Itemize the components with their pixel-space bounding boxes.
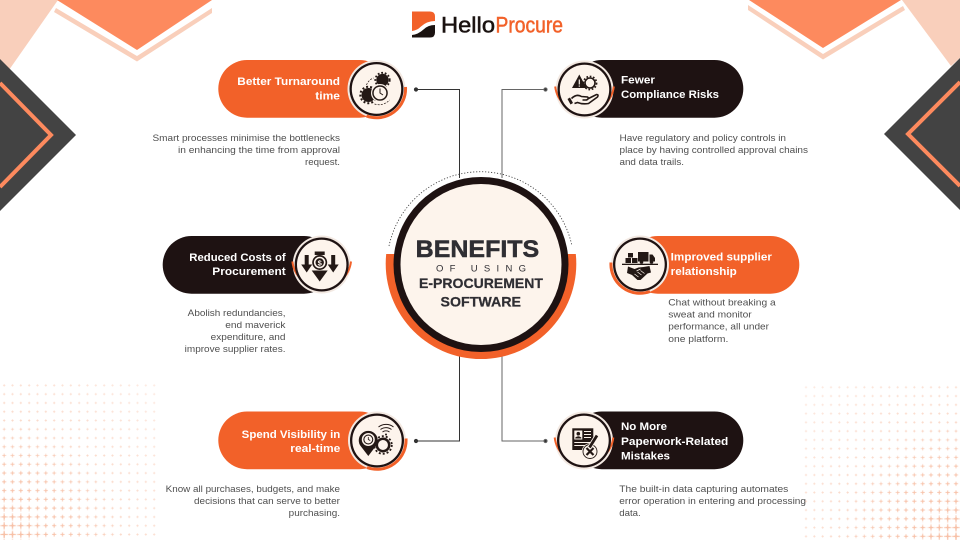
icon: warning, gear and hand xyxy=(555,60,614,118)
panel: fewer compliance risks xyxy=(555,60,808,167)
pill title: Procurement xyxy=(212,266,286,278)
pill title xyxy=(621,74,719,101)
pill title: Paperwork-Related xyxy=(621,436,728,448)
pill xyxy=(163,236,333,294)
icon: money and down arrows xyxy=(292,236,351,294)
description: sweat and monitor xyxy=(668,308,752,320)
description: Smart processes minimise the bottlenecks xyxy=(152,132,340,143)
pill xyxy=(218,60,388,118)
pill title: Mistakes xyxy=(621,450,670,462)
description: one platform. xyxy=(668,333,728,344)
description xyxy=(619,483,806,518)
orange half ring xyxy=(386,254,576,359)
description: Chat without breaking a xyxy=(668,296,777,308)
logo: HelloProcure xyxy=(412,12,563,38)
icon: money and down arrows: $ xyxy=(318,258,323,267)
pill title: Reduced Costs of xyxy=(189,252,286,264)
subheading: of using: OF USING xyxy=(436,264,526,275)
pill xyxy=(573,412,743,469)
decoration: top-left shapes xyxy=(0,0,212,211)
black ring xyxy=(394,177,568,352)
connector: bottom-left xyxy=(414,352,460,443)
icon: gears and clock xyxy=(348,60,406,118)
description: performance, all under xyxy=(668,320,769,332)
pill title: Improved supplier xyxy=(671,252,773,264)
description: request. xyxy=(305,156,340,167)
pill title xyxy=(237,76,340,102)
pill title: Fewer xyxy=(621,74,656,86)
icon: logo mark xyxy=(412,12,435,38)
pill title xyxy=(242,429,340,455)
logo wordmark: Procure xyxy=(496,12,563,38)
description xyxy=(620,132,808,167)
description: decisions that can serve to better xyxy=(194,495,340,506)
dotted arc xyxy=(389,172,572,246)
icon: document, pen and error mark xyxy=(555,412,613,470)
panel: better turnaround time xyxy=(152,60,406,167)
cream disc xyxy=(400,184,562,345)
connector: top-left xyxy=(414,88,460,178)
pill title xyxy=(189,252,286,278)
description: purchasing. xyxy=(289,507,340,518)
description: in enhancing the time from approval xyxy=(178,144,340,155)
center hub xyxy=(386,172,576,359)
panel: spend visibility in real-time xyxy=(166,412,406,518)
subheading: e-procurement software: SOFTWARE xyxy=(440,294,521,310)
description xyxy=(668,296,777,344)
pill title xyxy=(621,421,728,462)
panel: reduced costs of procurement xyxy=(163,236,351,354)
decoration: bottom-left plus grid xyxy=(0,381,158,540)
description: and data trails. xyxy=(620,156,684,167)
icon: truck and handshake xyxy=(611,236,669,294)
description: Have regulatory and policy controls in xyxy=(620,132,786,143)
icon: location pin clock xyxy=(348,412,406,470)
description xyxy=(185,307,286,354)
description xyxy=(152,132,340,167)
decoration: top-right shapes xyxy=(748,0,960,210)
pill title: Compliance Risks xyxy=(621,89,719,101)
panel: improved supplier relationship xyxy=(611,236,799,344)
panel: no more paperwork-related mistakes xyxy=(555,412,806,518)
connector: top-right xyxy=(502,88,547,178)
description: Abolish redundancies, xyxy=(188,307,286,318)
pill xyxy=(218,412,388,469)
logo wordmark: Hello xyxy=(441,12,495,38)
description: Know all purchases, budgets, and make xyxy=(166,483,340,494)
pill title xyxy=(671,252,773,278)
description xyxy=(166,483,340,518)
description: The built-in data capturing automates xyxy=(619,483,789,494)
pill title: Spend Visibility in xyxy=(242,429,340,441)
pill title: Better Turnaround xyxy=(237,76,340,88)
description: improve supplier rates. xyxy=(185,343,286,354)
pill xyxy=(573,60,743,118)
description: expenditure, and xyxy=(211,331,286,342)
pill xyxy=(629,236,799,294)
connector: bottom-right xyxy=(502,352,547,443)
pill title: real-time xyxy=(290,443,340,455)
pill title: time xyxy=(315,90,340,102)
description: end maverick xyxy=(225,319,286,330)
decoration: bottom-right plus grid xyxy=(802,383,960,540)
pill title: relationship xyxy=(671,266,737,278)
description: data. xyxy=(619,507,641,518)
description: error operation in entering and processing xyxy=(619,495,806,506)
description: place by having controlled approval chains xyxy=(620,144,808,155)
subheading: e-procurement software xyxy=(419,275,543,310)
pill title: No More xyxy=(621,421,667,433)
heading: benefits: BENEFITS xyxy=(416,236,539,263)
subheading: e-procurement software: E-PROCUREMENT xyxy=(419,275,543,291)
